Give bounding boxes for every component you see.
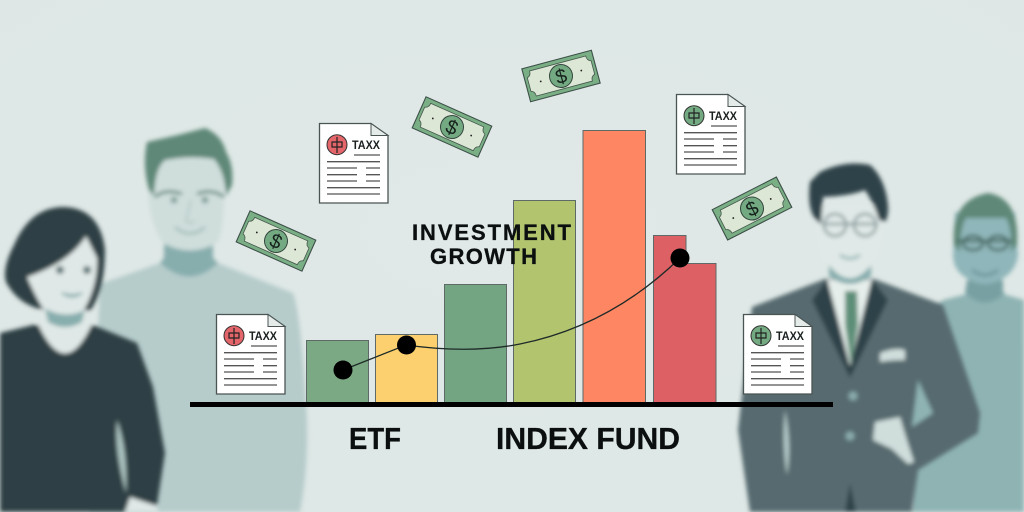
bar: red stepped	[654, 236, 716, 403]
icon: dollar bill middle	[412, 97, 492, 157]
icon: dollar bill top: $	[553, 65, 569, 89]
icon: tax document red lower left	[216, 314, 285, 394]
icon: tax document red lower left: TAXX	[249, 331, 277, 343]
icon: dollar bill right	[712, 177, 792, 240]
heading: investment growth	[412, 220, 572, 269]
heading: investment growth: GROWTH	[430, 244, 537, 269]
label: index fund: INDEX FUND	[496, 421, 680, 456]
icon: dollar bill middle: $	[442, 116, 461, 140]
bar: olive	[514, 200, 576, 404]
person: man behind left	[90, 128, 307, 512]
bar: ETF green	[306, 340, 368, 404]
heading: investment growth: INVESTMENT	[412, 220, 572, 245]
icon: tax document green lower right: TAXX	[776, 331, 804, 343]
icon: tax document green upper right: TAXX	[709, 111, 737, 123]
icon: tax document red upper left: TAXX	[352, 140, 380, 152]
bar chart	[306, 130, 716, 404]
icon: dollar bill right: $	[743, 197, 762, 222]
icon: dollar bill top	[522, 50, 600, 102]
icon: dollar bill left: $	[266, 230, 285, 254]
person: man behind right	[912, 193, 1024, 512]
growth curve	[334, 248, 690, 380]
bar: dark green	[444, 284, 506, 404]
icon: dollar bill left	[236, 211, 316, 271]
icon: tax document green upper right	[676, 94, 745, 174]
person: man in suit right	[738, 164, 980, 512]
bar: ETF yellow	[376, 334, 438, 404]
person: woman front left	[0, 207, 165, 512]
icon: tax document green lower right	[744, 314, 812, 394]
icon: tax document red upper left	[320, 124, 388, 203]
baseline axis	[190, 402, 833, 407]
label: ETF: ETF	[349, 421, 401, 456]
bar: orange	[583, 130, 646, 404]
